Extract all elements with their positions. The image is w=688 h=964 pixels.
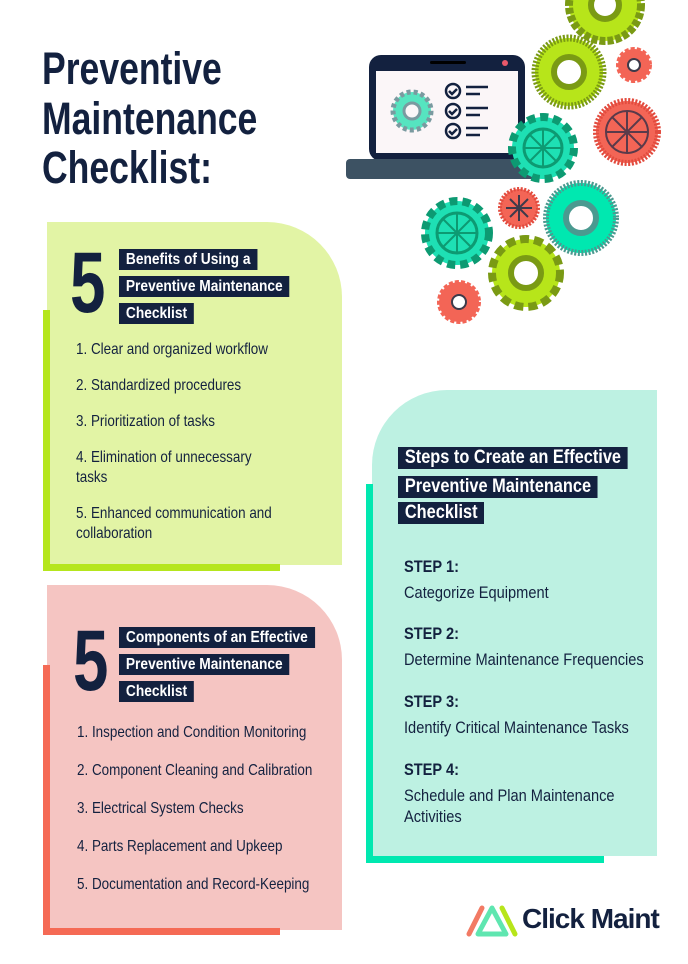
panel: benefits: tasks bbox=[76, 469, 107, 486]
benefits list: 1. Clear and organized workflow bbox=[76, 341, 268, 358]
step 1: Categorize Equipment bbox=[404, 583, 549, 602]
panel: steps: Checklist bbox=[405, 502, 478, 523]
panel: components: 5. Documentation and Record-Keeping bbox=[77, 876, 309, 893]
panel: benefits: collaboration bbox=[76, 525, 152, 542]
logo: Click Maint bbox=[522, 903, 659, 934]
step 3: STEP 3: bbox=[404, 692, 459, 711]
panel: components bbox=[43, 585, 342, 935]
step 1: STEP 1: bbox=[404, 557, 459, 576]
title: Maintenance bbox=[42, 92, 257, 144]
laptop bbox=[346, 55, 540, 179]
title: Checklist: bbox=[42, 142, 212, 193]
step 2: STEP 2: bbox=[404, 624, 459, 643]
panel: benefits: 2. Standardized procedures bbox=[76, 377, 241, 394]
illustration: laptop and gears bbox=[346, 0, 661, 324]
panel: benefits: 3. Prioritization of tasks bbox=[76, 413, 215, 430]
step 4 bbox=[404, 760, 615, 826]
heading labels: Steps to Create an Effective bbox=[405, 447, 621, 468]
panel: benefits: Preventive Maintenance bbox=[126, 278, 283, 295]
step 4: STEP 4: bbox=[404, 760, 459, 779]
panel: components: Checklist bbox=[126, 683, 187, 700]
heading labels: Benefits of Using a bbox=[126, 251, 250, 268]
panel: benefits: 4. Elimination of unnecessary bbox=[76, 449, 252, 466]
logo bbox=[466, 903, 660, 936]
components list: 1. Inspection and Condition Monitoring bbox=[77, 724, 306, 741]
gears bbox=[425, 0, 658, 322]
step 4: Activities bbox=[404, 807, 462, 826]
big number 5: 5 bbox=[73, 613, 108, 709]
step 2 bbox=[404, 624, 644, 669]
step 2: Determine Maintenance Frequencies bbox=[404, 650, 644, 669]
panel: components: 4. Parts Replacement and Upkeep bbox=[77, 838, 282, 855]
step 1 bbox=[404, 557, 549, 602]
heading labels: Components of an Effective bbox=[126, 629, 308, 646]
panel: components: Preventive Maintenance bbox=[126, 656, 283, 673]
big number 5: 5 bbox=[70, 235, 105, 331]
panel: benefits: 5. Enhanced communication and bbox=[76, 505, 272, 522]
panel: steps bbox=[366, 390, 657, 863]
step 3: Identify Critical Maintenance Tasks bbox=[404, 718, 629, 737]
step 4: Schedule and Plan Maintenance bbox=[404, 786, 615, 805]
panel: components: 3. Electrical System Checks bbox=[77, 800, 244, 817]
step 3 bbox=[404, 692, 629, 737]
panel: steps: Preventive Maintenance bbox=[405, 476, 591, 497]
panel: components: 2. Component Cleaning and Calibration bbox=[77, 762, 312, 779]
panel: benefits: Checklist bbox=[126, 305, 187, 322]
title bbox=[42, 43, 257, 193]
title: Preventive bbox=[42, 43, 222, 94]
panel: benefits bbox=[43, 222, 342, 571]
